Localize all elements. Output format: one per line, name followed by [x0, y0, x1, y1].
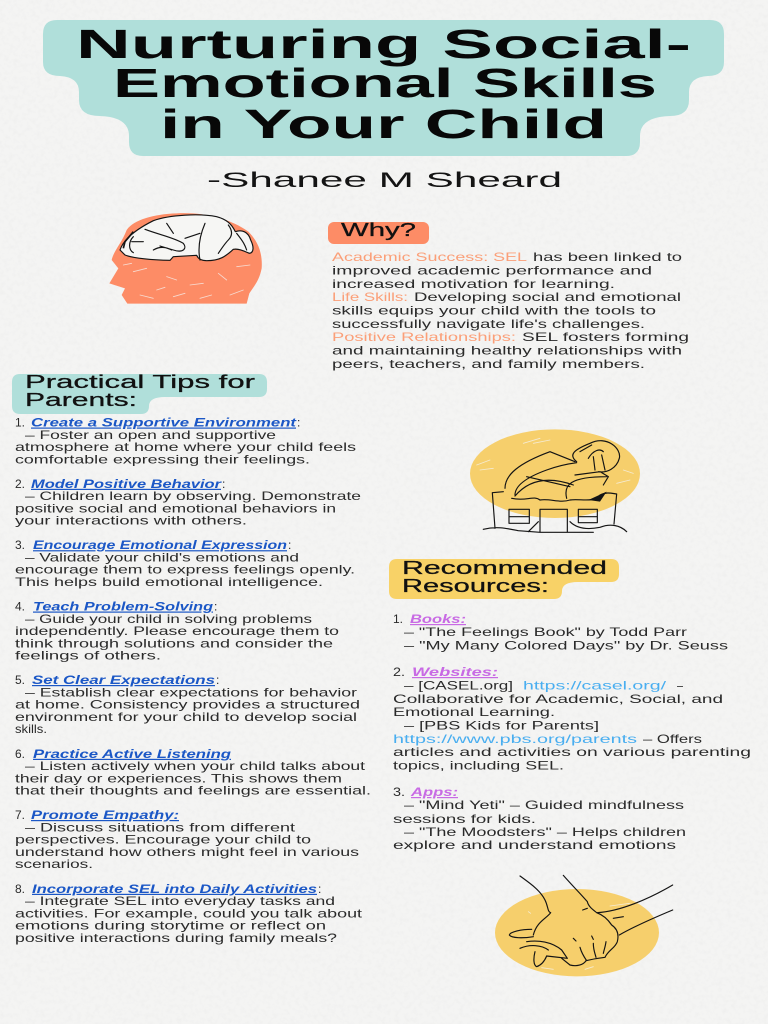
tip 3: – Validate your child's emotions and	[25, 550, 299, 564]
icon: child curled inside orange head	[109, 213, 262, 304]
tip 5: environment for your child to develop social	[15, 710, 357, 724]
resource group: websites: topics, including SEL.	[393, 758, 564, 772]
tip 6	[15, 747, 371, 798]
tip 5: Set Clear Expectations	[32, 673, 215, 687]
resource group: books: Books:	[410, 612, 466, 626]
tip 2	[15, 477, 361, 528]
tip 3: encourage them to express feelings openly.	[15, 563, 355, 577]
tip 4: feelings of others.	[15, 649, 161, 663]
tips heading: Parents:	[25, 390, 137, 410]
resource group: apps: – "The Moodsters" – Helps children	[404, 825, 686, 839]
tip 1: :	[297, 416, 300, 430]
why text block: Life Skills:	[332, 290, 408, 304]
tip 8: – Integrate SEL into everyday tasks and	[25, 894, 335, 908]
why text block: Academic Success: SEL	[332, 250, 527, 264]
resource group: apps: 3.	[393, 785, 405, 799]
why text block: increased motivation for learning.	[332, 277, 615, 291]
tips heading: Practical Tips for	[25, 372, 255, 392]
tips heading	[12, 372, 267, 414]
tip 6: that their thoughts and feelings are essential.	[15, 784, 371, 798]
tip 5: skills.	[15, 722, 47, 736]
resource group: books: – "My Many Colored Days" by Dr. Seuss	[404, 638, 728, 652]
tip 8	[15, 882, 363, 945]
why text block: Developing social and emotional	[414, 290, 681, 304]
why text block: skills equips your child with the tools to	[332, 304, 656, 318]
tip 4: – Guide your child in solving problems	[25, 612, 312, 626]
title text: in Your Child	[160, 101, 607, 147]
resource group: websites: articles and activities on various parenting	[393, 745, 751, 759]
resource group: apps: explore and understand emotions	[393, 838, 676, 852]
tip 4: :	[214, 600, 217, 614]
resource group: websites: 2.	[393, 665, 405, 679]
why text block: and maintaining healthy relationships with	[332, 344, 682, 358]
tip 8: 8.	[15, 882, 25, 896]
resource group: websites: –	[677, 678, 683, 692]
why text block: successfully navigate life's challenges.	[332, 317, 645, 331]
tip 6: Practice Active Listening	[33, 747, 232, 761]
resource group: books	[393, 612, 728, 652]
tip 7: Promote Empathy:	[31, 808, 179, 822]
tip 4: think through solutions and consider the	[15, 636, 333, 650]
why text block: has been linked to	[533, 250, 682, 264]
icon: holding hands with yellow circle	[495, 875, 673, 976]
title text: Nurturing Social-	[76, 21, 691, 67]
why heading pill	[328, 220, 429, 244]
tip 7: scenarios.	[15, 857, 93, 871]
resource group: websites: – [CASEL.org]	[404, 678, 513, 692]
resource group: websites: https://www.pbs.org/parents	[393, 732, 637, 746]
tip 2: positive social and emotional behaviors in	[15, 501, 336, 515]
resource group: websites: – [PBS Kids for Parents]	[404, 718, 599, 732]
tip 7: 7.	[15, 808, 25, 822]
tip 1: 1.	[15, 416, 25, 430]
tip 1	[15, 416, 356, 466]
tip 5: :	[216, 673, 219, 687]
why text block: improved academic performance and	[332, 264, 652, 278]
tip 1: atmosphere at home where your child feels	[15, 440, 356, 454]
why text block	[332, 250, 689, 371]
tip 7: – Discuss situations from different	[25, 820, 296, 834]
tip 8: emotions during storytime or reflect on	[15, 919, 326, 933]
panel: why	[328, 220, 689, 371]
resource group: apps: – "Mind Yeti" – Guided mindfulness	[404, 798, 684, 812]
tip 6: their day or experiences. This shows them	[15, 771, 342, 785]
why heading pill: Why?	[341, 220, 416, 240]
resources heading: Resources:	[402, 576, 549, 596]
tip 3: Encourage Emotional Expression	[33, 538, 287, 552]
tip 3: 3.	[15, 538, 25, 552]
resource group: websites: – Offers	[643, 732, 702, 746]
tip 6: 6.	[15, 747, 25, 761]
tip 4: 4.	[15, 600, 25, 614]
tip 4: independently. Please encourage them to	[15, 624, 339, 638]
tip 2: – Children learn by observing. Demonstrate	[25, 489, 361, 503]
title text	[76, 21, 691, 147]
tip 1: – Foster an open and supportive	[25, 428, 276, 442]
tip 3: This helps build emotional intelligence.	[15, 575, 323, 589]
tip 1: Create a Supportive Environment	[31, 416, 297, 430]
tip 5: – Establish clear expectations for behavior	[25, 685, 357, 699]
tip 7	[15, 808, 359, 871]
resource group: websites: Websites:	[412, 665, 498, 679]
resource group: books: 1.	[393, 612, 403, 626]
tip 2: your interactions with others.	[15, 514, 247, 528]
tip 7: understand how others might feel in various	[15, 845, 359, 859]
why text block: SEL fosters forming	[522, 330, 689, 344]
resource group: books: – "The Feelings Book" by Todd Parr	[404, 625, 687, 639]
tip 2: Model Positive Behavior	[31, 477, 223, 491]
panel: recommended resources	[389, 558, 751, 852]
tip 8: :	[318, 882, 321, 896]
resources heading	[389, 558, 619, 599]
tip 5: 5.	[15, 673, 25, 687]
tip 6: – Listen actively when your child talks about	[25, 759, 366, 773]
resource group: apps: sessions for kids.	[393, 812, 536, 826]
tip 4	[15, 600, 339, 663]
tip 3: :	[288, 538, 291, 552]
icon: curled figure over house with yellow circle	[470, 429, 640, 532]
resource group: websites: Collaborative for Academic, Social, and	[393, 692, 723, 706]
tip 4: Teach Problem-Solving	[33, 600, 214, 614]
title background shape	[43, 20, 724, 156]
tip 5	[15, 673, 360, 736]
tip 2: 2.	[15, 477, 25, 491]
why text block: Positive Relationships:	[332, 330, 516, 344]
resource group: websites: Emotional Learning.	[393, 705, 555, 719]
tip 2: :	[222, 477, 225, 491]
resource group: apps: Apps:	[410, 785, 458, 799]
title banner	[43, 20, 724, 156]
resource group: websites	[393, 665, 751, 772]
why text block: peers, teachers, and family members.	[332, 357, 645, 371]
title text: Emotional Skills	[113, 60, 657, 106]
resource group: apps	[393, 785, 686, 852]
tip 8: Incorporate SEL into Daily Activities	[32, 882, 317, 896]
panel: practical tips for parents	[12, 372, 371, 945]
tip 5: at home. Consistency provides a structured	[15, 698, 360, 712]
tip 1: comfortable expressing their feelings.	[15, 452, 310, 466]
tip 8: positive interactions during family meals?	[15, 931, 337, 945]
author byline: -Shanee M Sheard	[207, 168, 562, 192]
tip 3	[15, 538, 355, 589]
resources heading: Recommended	[402, 558, 607, 578]
tip 7: perspectives. Encourage your child to	[15, 833, 311, 847]
tip 8: activities. For example, could you talk about	[15, 906, 363, 920]
resource group: websites: https://casel.org/	[523, 678, 667, 692]
